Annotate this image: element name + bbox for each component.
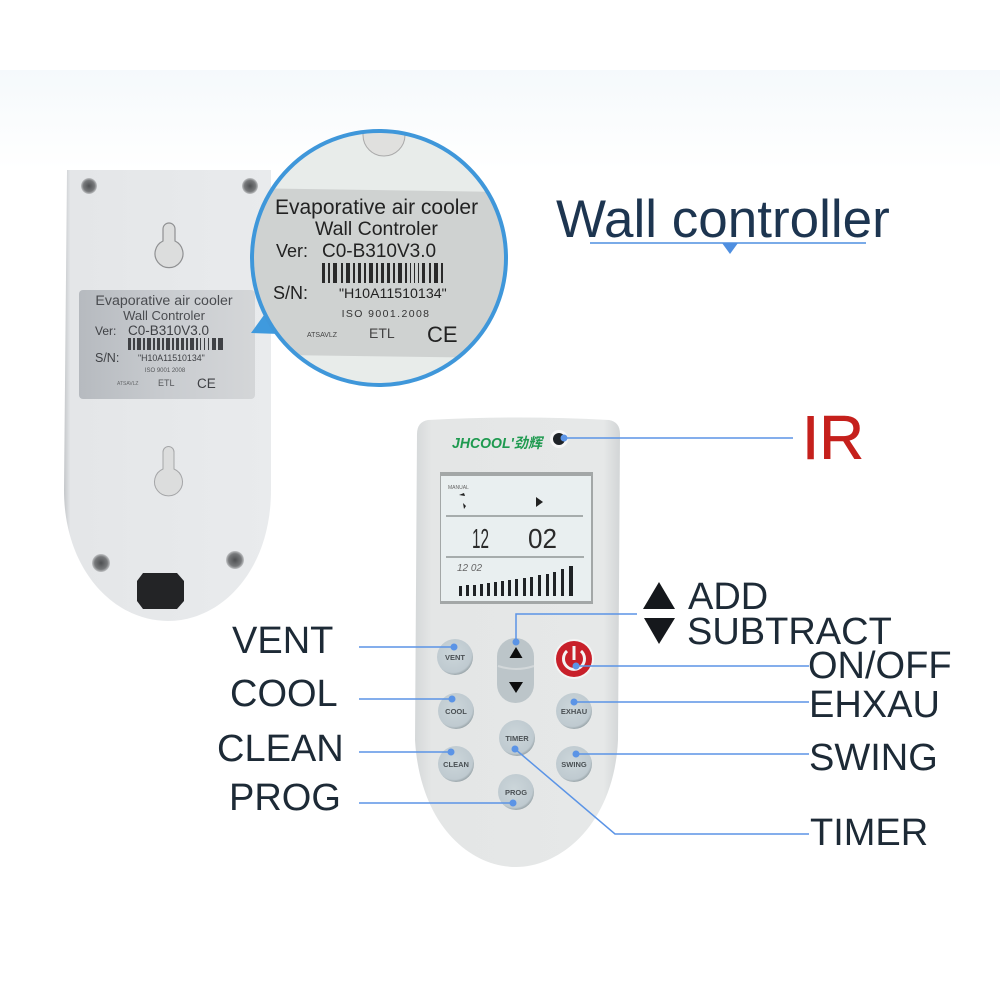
background wash — [0, 70, 1000, 170]
label: IR: IR — [802, 404, 864, 473]
magnified label circle: ETL — [369, 325, 395, 341]
magnified label circle: ATSAVLZ — [307, 332, 338, 339]
signal bars — [459, 566, 573, 596]
labels: left — [217, 620, 344, 819]
magnified label circle: ISO 9001.2008 — [342, 308, 430, 320]
brand logo: JHCOOL'劲辉 — [452, 435, 544, 452]
magnified label circle: S/N: — [273, 283, 308, 303]
product label: Evaporative air cooler — [95, 293, 233, 309]
product label — [79, 290, 255, 399]
labels: right: SUBTRACT — [687, 611, 892, 653]
round buttons: SWING — [561, 760, 587, 769]
LCD screen: 12 02 — [457, 563, 482, 574]
labels: right: ON/OFF — [808, 645, 952, 687]
round buttons: PROG — [505, 788, 527, 797]
product label: Wall Controler — [123, 308, 206, 323]
callout dots — [448, 434, 580, 806]
screw holes top — [81, 178, 258, 194]
magnified label plate — [240, 188, 510, 358]
magnified label circle: C0-B310V3.0 — [322, 241, 436, 262]
LCD screen: MANUAL — [448, 485, 469, 491]
labels: right: EHXAU — [809, 684, 940, 726]
LCD screen — [440, 472, 593, 604]
labels: left: COOL — [230, 673, 338, 715]
controller back panel — [64, 170, 271, 621]
power button — [554, 639, 594, 679]
round buttons: EXHAU — [561, 707, 587, 716]
round buttons: VENT — [445, 653, 465, 662]
magnified label circle: CE — [427, 322, 458, 347]
product label: CE — [197, 376, 216, 391]
product label: "H10A11510134" — [138, 353, 205, 363]
hole in magnified view — [362, 133, 406, 156]
up/down rocker — [497, 638, 534, 703]
magnifier pointer — [251, 308, 280, 334]
product label: C0-B310V3.0 — [128, 323, 209, 338]
labels: left: CLEAN — [217, 728, 344, 770]
labels: right: TIMER — [810, 812, 928, 854]
labels: right: ADD — [688, 576, 768, 618]
labels: left: VENT — [232, 620, 333, 662]
product label: S/N: — [95, 351, 119, 365]
product label: ATSAVLZ — [117, 381, 138, 387]
round buttons: TIMER — [505, 734, 529, 743]
magnified label circle: Ver: — [276, 241, 308, 261]
LCD screen: 02 — [528, 523, 557, 554]
LCD screen: 12 — [472, 523, 489, 554]
round buttons: COOL — [445, 707, 467, 716]
magnified label circle: "H10A11510134" — [339, 286, 447, 302]
add/subtract arrows — [643, 582, 675, 644]
labels: right — [687, 576, 952, 854]
title: Wall controller — [556, 190, 890, 249]
magnified label circle — [240, 114, 510, 385]
IR sensor — [550, 430, 568, 448]
RJ connector port — [137, 573, 184, 609]
keyhole slot bottom — [154, 447, 183, 496]
keyhole slot top — [155, 223, 183, 268]
product label: ETL — [158, 378, 175, 388]
callout lines — [359, 438, 809, 834]
magnified label circle: Evaporative air cooler — [275, 196, 478, 219]
labels: left: PROG — [229, 777, 341, 819]
remote control — [415, 418, 620, 867]
screw holes bottom — [92, 551, 244, 572]
magnified label circle: Wall Controler — [315, 218, 438, 240]
round buttons — [437, 639, 592, 810]
product label: Ver: — [95, 324, 116, 338]
barcode — [322, 263, 443, 283]
labels: right: SWING — [809, 737, 938, 779]
product label: ISO 9001 2008 — [145, 368, 186, 374]
round buttons: CLEAN — [443, 760, 469, 769]
